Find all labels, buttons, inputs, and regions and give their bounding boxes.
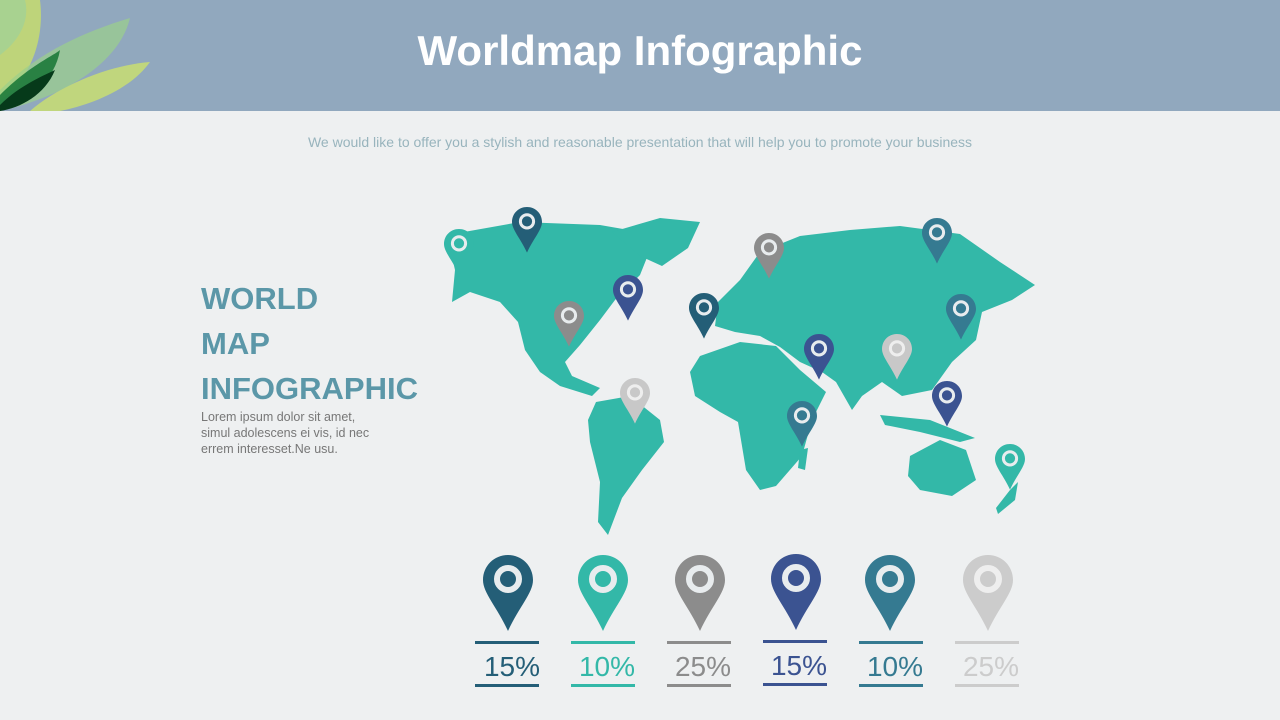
item 15% navy xyxy=(763,554,827,686)
side heading: INFOGRAPHIC xyxy=(201,371,418,406)
subtitle: We would like to offer you a stylish and reasonable presentation that will help you to promote your business xyxy=(308,134,972,150)
item 10% teal xyxy=(571,555,635,687)
item 15% navy: 15% xyxy=(771,650,827,681)
item 25% gray xyxy=(667,555,731,687)
item 10% blue-teal xyxy=(859,555,923,687)
item 10% teal: 10% xyxy=(579,651,635,682)
map pins xyxy=(444,207,1025,490)
side heading xyxy=(201,281,418,406)
item 15% dark xyxy=(475,555,540,687)
side heading: WORLD xyxy=(201,281,318,316)
side text: Lorem ipsum dolor sit amet, simul adolescens ei vis, id nec errem interesset.Ne usu. xyxy=(201,410,369,456)
item 15% dark: 15% xyxy=(484,651,540,682)
item 25% light xyxy=(955,555,1019,687)
item 25% light: 25% xyxy=(963,651,1019,682)
header bar xyxy=(0,0,1280,111)
item 10% blue-teal: 10% xyxy=(867,651,923,682)
side heading: MAP xyxy=(201,326,270,361)
decorative leaves xyxy=(0,0,150,111)
title: Worldmap Infographic xyxy=(418,27,862,74)
item 25% gray: 25% xyxy=(675,651,731,682)
